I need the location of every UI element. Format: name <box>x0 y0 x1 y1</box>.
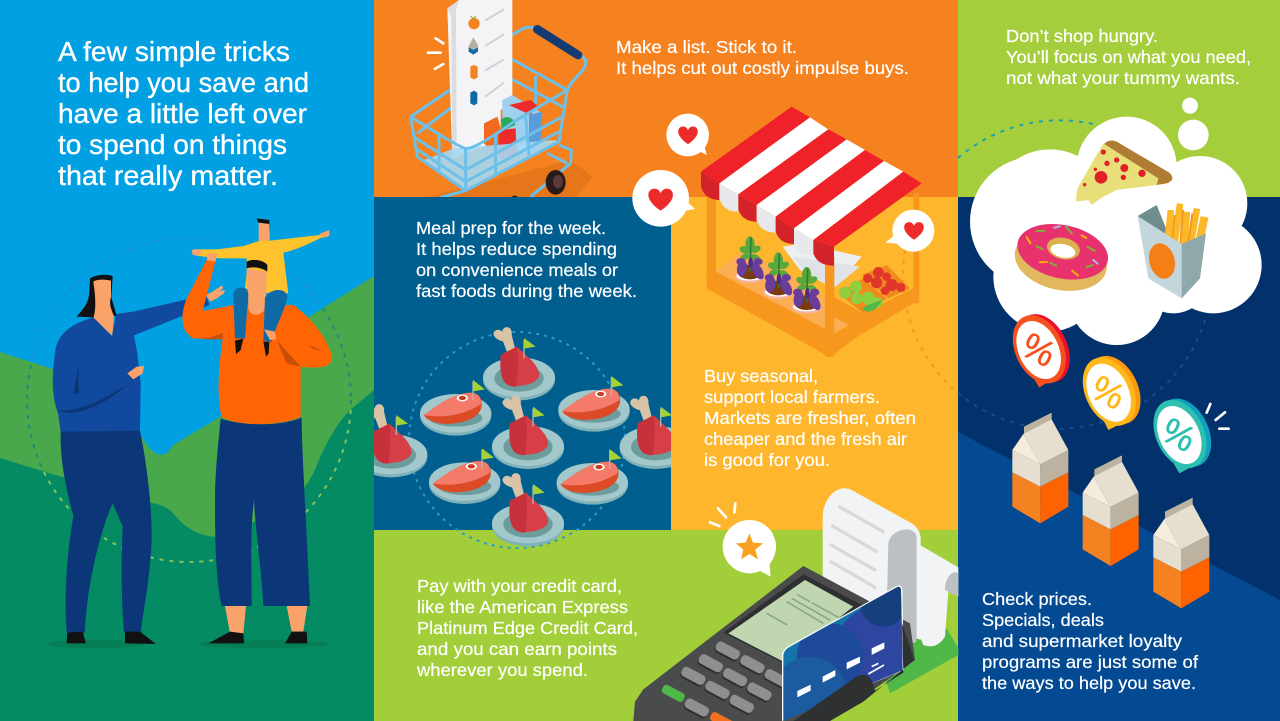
illustration: shopping cart with list <box>411 0 592 206</box>
panel: lighter blue wedge <box>958 432 1280 721</box>
text: check prices: programs are just some of <box>982 652 1198 672</box>
panel: light green hill <box>0 276 374 721</box>
man <box>182 253 332 643</box>
text: don't shop hungry: not what your tummy wants. <box>1006 68 1240 88</box>
text: meal prep: fast foods during the week. <box>416 281 637 301</box>
leg plate bottom <box>492 473 564 546</box>
tag teal percent: % <box>1155 409 1203 460</box>
terminal body <box>633 566 915 721</box>
leg plate right <box>620 396 671 469</box>
text: pay with credit card: and you can earn points <box>417 639 617 659</box>
milk carton two <box>1083 455 1139 566</box>
crate of greens <box>833 278 913 333</box>
eggplant plants <box>735 236 823 313</box>
text: check prices: the ways to help you save. <box>982 673 1196 693</box>
text: buy seasonal: support local farmers. <box>704 387 880 407</box>
leg plate top <box>483 327 555 400</box>
text: meal prep: Meal prep for the week. <box>416 218 606 238</box>
receipt <box>823 488 958 646</box>
tag yellow percent <box>1072 347 1151 434</box>
text: pay with credit card: wherever you spend. <box>416 660 588 680</box>
milk carton three <box>1153 498 1209 608</box>
text: buy seasonal: is good for you. <box>704 450 830 470</box>
heart bubble right <box>885 210 934 252</box>
title <box>58 36 309 191</box>
title: A few simple tricks <box>58 36 290 67</box>
title: to help you save and <box>58 67 309 98</box>
leg plate left <box>374 404 428 478</box>
cloud bubbles <box>1178 98 1209 150</box>
text: buy seasonal: Buy seasonal, <box>704 366 818 386</box>
dashed circle around meals <box>409 332 625 548</box>
card stand <box>793 623 914 721</box>
text: buy seasonal <box>704 366 916 470</box>
panel: family sky <box>0 0 374 721</box>
awning scallops <box>701 172 834 266</box>
front post <box>825 257 834 357</box>
ground shadows <box>47 640 329 648</box>
terminal keys <box>661 640 790 721</box>
woman <box>53 275 225 644</box>
text: make a list: It helps cut out costly impulse buys. <box>616 58 909 78</box>
illustration: payment terminal, card and receipt <box>633 488 958 721</box>
title: have a little left over <box>58 98 307 129</box>
text: check prices: Check prices. <box>982 589 1092 609</box>
steak plate upper left <box>420 380 491 436</box>
text: make a list: Make a list. Stick to it. <box>616 37 797 57</box>
tag red percent <box>1002 306 1080 392</box>
tag red percent: % <box>1015 324 1063 375</box>
star bubble <box>723 520 776 577</box>
green mat <box>883 628 958 693</box>
cloud <box>970 117 1262 345</box>
text: don't shop hungry: Don’t shop hungry. <box>1006 26 1158 46</box>
platform top <box>716 250 862 333</box>
text: pay with credit card: Platinum Edge Credit Card, <box>417 618 638 638</box>
cart floor <box>424 140 559 192</box>
text: meal prep: on convenience meals or <box>416 260 618 280</box>
panel: meal prep blue <box>374 197 671 530</box>
text: pay with credit card: like the American Express <box>417 597 628 617</box>
panel: list orange <box>374 0 958 197</box>
wheels <box>511 170 566 197</box>
cart shadow <box>430 160 592 197</box>
title: to spend on things <box>58 129 287 160</box>
panel: farmers yellow <box>671 197 958 530</box>
dashed circle around family <box>27 238 351 562</box>
panel: navy right <box>958 197 1280 721</box>
panel: lime payment <box>374 530 958 721</box>
tag teal percent <box>1143 390 1222 477</box>
text: check prices: and supermarket loyalty <box>982 631 1182 651</box>
posts and base <box>707 193 919 357</box>
text: meal prep <box>416 218 637 301</box>
text: buy seasonal: Markets are fresher, often <box>704 408 916 428</box>
terminal screen <box>723 574 865 667</box>
illustration: family <box>47 218 332 648</box>
cart back wires and handle <box>411 27 586 133</box>
handle grip <box>537 29 578 55</box>
steak plate lower left <box>429 448 500 504</box>
credit card <box>782 586 904 721</box>
text: make a list <box>616 37 909 78</box>
dashed circle around market and food <box>903 120 1205 429</box>
groceries <box>484 95 542 159</box>
steak plate upper right <box>558 376 630 432</box>
leg plate middle <box>492 396 564 469</box>
text: meal prep: It helps reduce spending <box>416 239 617 259</box>
thought cloud with food <box>970 98 1262 345</box>
sparkle lines <box>1207 404 1229 429</box>
text: buy seasonal: cheaper and the fresh air <box>704 429 907 449</box>
illustration: market stall <box>632 107 934 357</box>
illustration: discount tags and milk cartons <box>1002 306 1229 608</box>
shopping list paper <box>447 0 512 158</box>
heart bubble top <box>666 114 709 156</box>
milk carton one <box>1012 413 1068 523</box>
text: check prices: Specials, deals <box>982 610 1104 630</box>
sparkle lines <box>710 503 735 526</box>
illustration: meat plates <box>374 327 671 546</box>
sparkle lines <box>428 38 443 69</box>
panel: dark green hill <box>0 390 374 721</box>
white sacks <box>783 243 862 288</box>
crate of tomatoes <box>862 265 910 298</box>
text: check prices <box>982 589 1198 693</box>
child on shoulders <box>192 218 329 293</box>
fries box <box>1138 203 1208 298</box>
pizza slice <box>1076 141 1172 205</box>
text: pay with credit card <box>416 576 638 680</box>
panel: lime top right <box>958 0 1280 197</box>
title: that really matter. <box>58 160 278 191</box>
text: don't shop hungry <box>1006 26 1251 88</box>
heart bubble large <box>632 170 695 227</box>
text: pay with credit card: Pay with your credit card, <box>417 576 622 596</box>
donut <box>1009 216 1114 299</box>
awning stripes <box>701 107 922 247</box>
tag yellow percent: % <box>1084 367 1132 418</box>
cart front basket <box>411 90 571 197</box>
text: don't shop hungry: You’ll focus on what you need, <box>1006 47 1251 67</box>
steak plate lower right <box>557 449 628 505</box>
